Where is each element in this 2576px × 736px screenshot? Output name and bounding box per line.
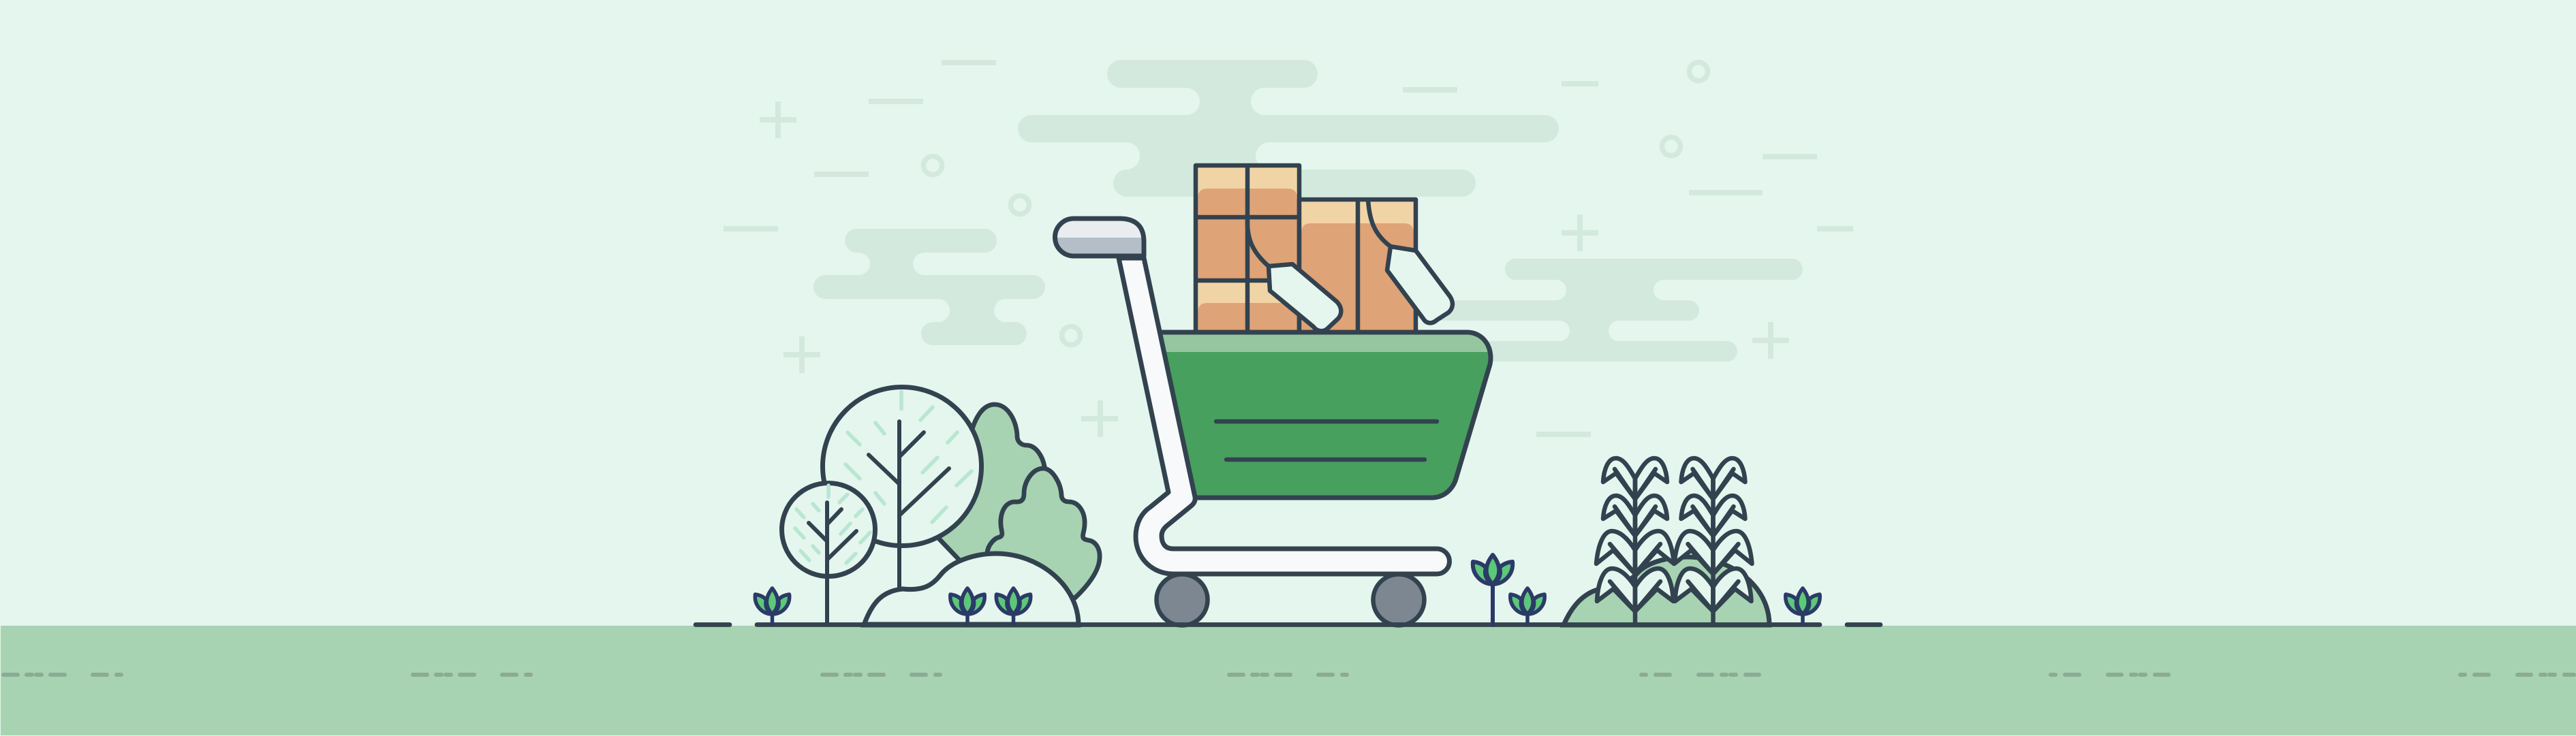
- back bush: [937, 404, 1045, 579]
- tag body: [1269, 264, 1341, 331]
- sprout 1: [755, 588, 790, 624]
- cloud: right: [1431, 259, 1803, 362]
- cart handle: [1055, 219, 1144, 256]
- small tree: [782, 483, 875, 624]
- cloud: top centre: [1018, 60, 1559, 197]
- big tree leaf marks: [845, 392, 972, 522]
- basket label lines: [1216, 421, 1437, 460]
- background clouds and sparkles: [724, 60, 1853, 437]
- basket outline: [1160, 332, 1491, 498]
- small tree crown: [782, 483, 875, 576]
- tag string: [1247, 219, 1269, 266]
- tag body: [1387, 246, 1453, 323]
- big tree: [823, 387, 981, 590]
- cart wheel left: [1157, 575, 1207, 625]
- basket light band: [1162, 335, 1488, 352]
- price tag on wide box: [1368, 199, 1453, 323]
- sprout 3: [996, 588, 1031, 624]
- tall sprout: [1473, 555, 1512, 625]
- small tree leaf marks: [795, 485, 870, 563]
- white hill: [864, 554, 1078, 625]
- cart basket: [1151, 332, 1499, 498]
- parcel: wide box: [1299, 199, 1416, 332]
- cloud: left: [813, 229, 1045, 345]
- sprout 5: [1510, 588, 1545, 624]
- ground band: [1, 626, 2576, 735]
- cart wheel right: [1374, 575, 1424, 625]
- ground dash pattern: [1, 673, 2576, 677]
- sky rings: [924, 63, 1707, 345]
- price tag on tall box: [1247, 219, 1341, 331]
- sprout 2: [950, 588, 984, 624]
- ground line: [696, 622, 1880, 627]
- small tree trunk and branches: [809, 502, 856, 624]
- sky plus signs: [760, 101, 1789, 437]
- tag string: [1368, 199, 1391, 246]
- corn stalk right: [1675, 458, 1752, 624]
- big tree trunk and branches: [869, 421, 949, 590]
- sprout 6: [1786, 588, 1820, 624]
- sky dashes: [724, 60, 1853, 437]
- front bush: [987, 468, 1100, 598]
- big tree crown: [823, 387, 981, 546]
- corn stalk left: [1596, 458, 1674, 624]
- green hill behind corn: [1564, 557, 1769, 625]
- parcel: tall box: [1196, 165, 1299, 332]
- cart frame: [1119, 258, 1450, 574]
